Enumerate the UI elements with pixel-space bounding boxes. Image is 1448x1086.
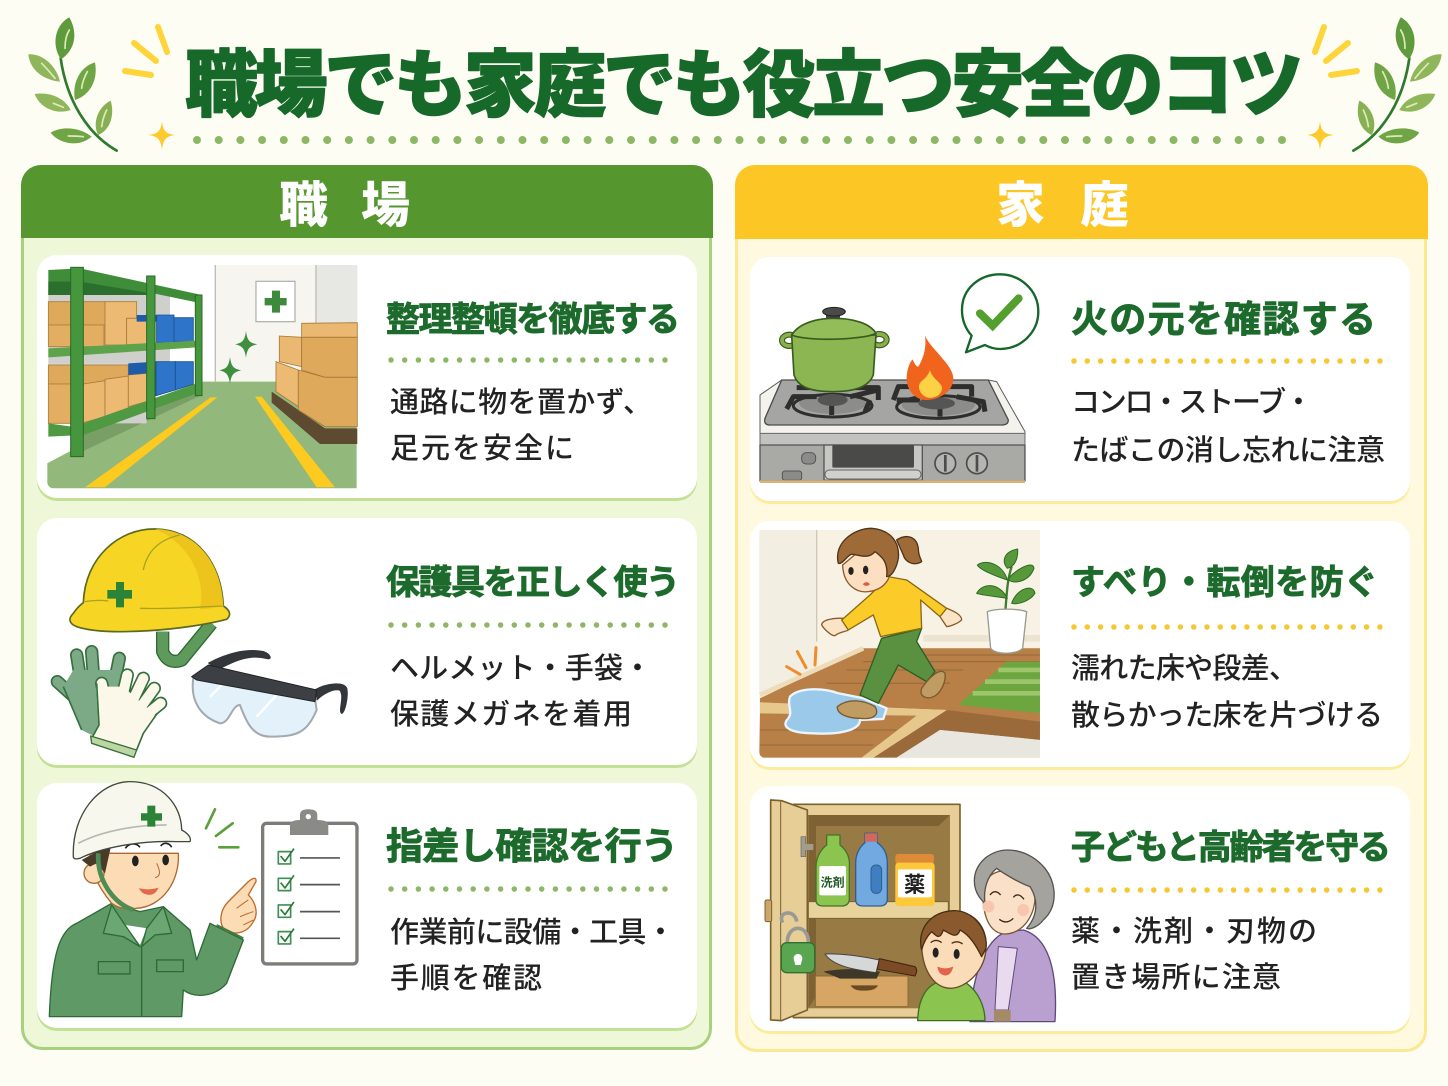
body text: pointing check xyxy=(390,916,675,995)
panel: home xyxy=(735,165,1428,1050)
title: 職場でも家庭でも役立つ安全のコツ xyxy=(185,45,1303,126)
body text: pointing check: 手順を確認 xyxy=(390,962,542,995)
body text: protective gear: ヘルメット・手袋・ xyxy=(390,652,652,685)
illustration: girl slipping near puddle xyxy=(759,528,1040,758)
heading: tidy: 整理整頓を徹底する xyxy=(386,301,680,339)
body text: tidy xyxy=(390,386,652,465)
card: slips xyxy=(750,521,1410,770)
body text: fire: コンロ・ストーブ・ xyxy=(1071,386,1313,419)
illustration: cabinet, child and grandmother: 洗剤 xyxy=(821,875,845,890)
illustration: helmet, gloves, goggles xyxy=(57,529,347,757)
card: tidy xyxy=(37,255,697,501)
illustration: worker with checklist xyxy=(49,782,357,1017)
laurel: top right xyxy=(1353,17,1442,151)
card: protective gear xyxy=(37,518,697,768)
panel header: home: 家庭 xyxy=(996,179,1129,233)
body text: slips: 濡れた床や段差、 xyxy=(1071,652,1298,685)
laurel: top left xyxy=(28,17,117,151)
card: pointing check xyxy=(37,782,697,1031)
body text: tidy: 足元を安全に xyxy=(390,432,574,465)
panel header: home xyxy=(735,165,1428,239)
illustration: cabinet, child and grandmother: 薬 xyxy=(904,873,925,897)
panel: workplace xyxy=(21,165,713,1048)
body text: children and elderly: 薬・洗剤・刃物の xyxy=(1071,915,1317,948)
body text: protective gear: 保護メガネを着用 xyxy=(390,698,632,731)
body text: fire: たばこの消し忘れに注意 xyxy=(1071,434,1385,467)
sparkle rays and star: top right xyxy=(1307,27,1357,150)
illustration: cabinet, child and grandmother xyxy=(765,800,1056,1022)
panel header: workplace: 職場 xyxy=(279,179,410,233)
heading: slips: すべり・転倒を防ぐ xyxy=(1071,564,1378,602)
body text: slips: 散らかった床を片づける xyxy=(1071,699,1383,732)
body text: tidy: 通路に物を置かず、 xyxy=(390,386,652,419)
heading: fire: 火の元を確認する xyxy=(1071,299,1376,340)
sparkle rays and star: top left xyxy=(125,27,175,150)
body text: children and elderly: 置き場所に注意 xyxy=(1071,961,1281,994)
body text: children and elderly xyxy=(1071,915,1317,994)
heading: children and elderly: 子どもと高齢者を守る xyxy=(1071,829,1391,867)
illustration: stove with pot, flame and check bubble xyxy=(760,274,1038,482)
card: children and elderly xyxy=(750,786,1410,1034)
heading: pointing check: 指差し確認を行う xyxy=(386,826,678,867)
body text: pointing check: 作業前に設備・工具・ xyxy=(390,916,675,949)
body text: slips xyxy=(1071,652,1383,732)
body text: fire xyxy=(1071,386,1385,467)
heading: protective gear: 保護具を正しく使う xyxy=(386,564,680,602)
panel header: workplace xyxy=(21,165,713,238)
card: fire xyxy=(750,257,1410,504)
body text: protective gear xyxy=(390,652,652,731)
illustration: warehouse xyxy=(47,265,357,488)
